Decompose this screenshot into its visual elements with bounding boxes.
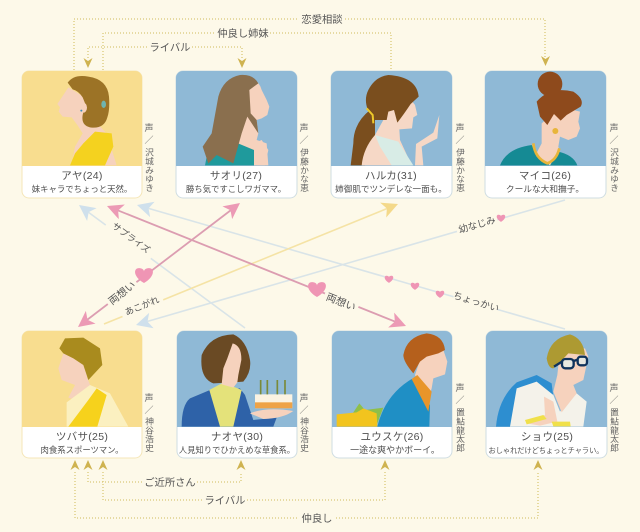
label: 両想い right	[322, 288, 361, 315]
voice: 伊藤かな恵: 声	[299, 122, 309, 133]
voice: 伊藤かな恵: 声	[455, 122, 465, 133]
heart: ちょっかい 2	[411, 283, 419, 290]
top relationship connectors	[74, 13, 550, 70]
label: あこがれ: あこがれ	[123, 294, 161, 317]
voice: 置鮎龍太郎: 置鮎龍太郎	[609, 408, 619, 453]
heart: large centre	[308, 282, 326, 297]
connector: 恋愛相談: 恋愛相談	[301, 13, 343, 26]
voice: 伊藤かな恵	[299, 122, 309, 192]
voice: 伊藤かな恵: ／	[455, 135, 465, 145]
label: サプライズ	[105, 215, 158, 259]
voice: 神谷浩史	[299, 392, 309, 453]
connector: ライバル (top): ライバル	[150, 42, 190, 54]
voice: 置鮎龍太郎	[609, 382, 619, 453]
portrait: アヤ	[57, 76, 117, 165]
label: 両想い left	[103, 276, 140, 310]
name: マイコ: マイコ(26)	[519, 170, 571, 182]
name: アヤ: アヤ(24)	[61, 170, 103, 182]
connector: 恋愛相談	[74, 13, 550, 70]
portrait: ハルカ	[351, 75, 439, 165]
name: ナオヤ: ナオヤ(30)	[211, 431, 263, 443]
voice: 沢城みゆき	[609, 122, 619, 192]
voice: 神谷浩史: 声	[299, 392, 309, 403]
portrait: ナオヤ	[182, 334, 293, 427]
voice: 伊藤かな恵: 伊藤かな恵	[299, 147, 309, 192]
voice: 置鮎龍太郎: ／	[609, 395, 619, 405]
voice: 置鮎龍太郎: 声	[455, 382, 465, 393]
panel: サオリ	[176, 71, 297, 198]
panel: ナオヤ	[177, 331, 297, 458]
voice: 沢城みゆき	[144, 122, 154, 192]
panel: ユウスケ	[332, 331, 452, 458]
label: あこがれ	[119, 291, 165, 320]
connector: ライバル (bottom)	[98, 460, 390, 507]
bottom relationship connectors	[70, 460, 542, 525]
description: マイコ: クールな大和撫子。	[506, 183, 584, 194]
portrait: ユウスケ	[337, 333, 447, 427]
connector: 仲良し: 仲良し	[302, 512, 332, 525]
arrow: サプライズ	[74, 199, 245, 328]
description: ハルカ: 姉御肌でツンデレな一面も。	[335, 183, 447, 194]
diagonal relationship arrows	[73, 197, 565, 333]
heart: ちょっかい 1	[385, 276, 393, 283]
voice: 置鮎龍太郎: 置鮎龍太郎	[455, 408, 465, 453]
voice: 神谷浩史: ／	[299, 405, 309, 415]
voice: 置鮎龍太郎: ／	[455, 395, 465, 405]
description: ショウ: おしゃれだけどちょっとチャラい。	[489, 446, 603, 455]
panel: マイコ	[485, 71, 606, 198]
panel: ショウ	[486, 331, 607, 458]
label: 両想い right: 両想い	[324, 290, 358, 314]
portrait: マイコ	[500, 72, 582, 165]
name: サオリ: サオリ(27)	[210, 170, 262, 182]
connector: 仲良し	[70, 460, 542, 525]
voice: 置鮎龍太郎: 声	[609, 382, 619, 393]
voice: 神谷浩史: 声	[144, 392, 154, 403]
voice: 伊藤かな恵	[455, 122, 465, 192]
label: ちょっかい: ちょっかい	[452, 290, 500, 315]
voice: 神谷浩史: 神谷浩史	[299, 416, 309, 453]
name: ショウ: ショウ(25)	[521, 431, 573, 443]
voice: 沢城みゆき: ／	[609, 135, 619, 145]
arrow: あこがれ	[104, 197, 401, 324]
portrait: ショウ	[496, 334, 588, 427]
voice: 置鮎龍太郎	[455, 382, 465, 453]
connector: ライバル (bottom): ライバル	[205, 495, 245, 507]
description: アヤ: 妹キャラでちょっと天然。	[32, 184, 132, 194]
voice: 神谷浩史	[144, 392, 154, 453]
connector: ご近所さん: ご近所さん	[144, 476, 196, 489]
portrait: サオリ	[203, 75, 269, 165]
voice: 沢城みゆき: 声	[609, 122, 619, 133]
voice: 沢城みゆき: ／	[144, 135, 154, 145]
description: サオリ: 勝ち気ですこしワガママ。	[186, 184, 286, 194]
voice: 神谷浩史: ／	[144, 405, 154, 415]
voice: 伊藤かな恵: ／	[299, 135, 309, 145]
heart: 幼なじみ	[497, 215, 505, 222]
arrow: 両想い (ツバサ–サオリ)	[73, 197, 245, 333]
panel: ツバサ	[22, 331, 142, 458]
panel: アヤ	[22, 71, 142, 198]
label: 幼なじみ: 幼なじみ	[457, 214, 497, 236]
description: ユウスケ: 一途な爽やかボーイ。	[350, 445, 440, 455]
voice: 沢城みゆき: 声	[144, 122, 154, 133]
connector: 仲良し姉妹	[103, 27, 391, 70]
connector: 仲良し姉妹: 仲良し姉妹	[217, 27, 269, 40]
name: ハルカ: ハルカ(31)	[365, 170, 417, 182]
name: ユウスケ: ユウスケ(26)	[360, 431, 424, 443]
voice: 伊藤かな恵: 伊藤かな恵	[455, 147, 465, 192]
connector: ライバル (top)	[84, 42, 246, 68]
label: 両想い left: 両想い	[106, 278, 138, 308]
arrow: 両想い (ユウスケ–アヤ)	[104, 199, 409, 333]
panel: ハルカ	[331, 71, 452, 198]
arrow: ちょっかい	[135, 197, 565, 329]
voice: 神谷浩史: 神谷浩史	[144, 416, 154, 453]
arrow: 幼なじみ	[134, 200, 565, 333]
name: ツバサ: ツバサ(25)	[56, 431, 108, 443]
voice: 沢城みゆき: 沢城みゆき	[609, 147, 619, 192]
portrait: ツバサ	[58, 338, 128, 427]
description: ナオヤ: 人見知りでひかえめな草食系。	[179, 445, 295, 455]
voice: 沢城みゆき: 沢城みゆき	[144, 147, 154, 192]
label: サプライズ: サプライズ	[110, 220, 153, 255]
heart: ちょっかい 3	[436, 291, 444, 298]
connector: ご近所さん	[84, 460, 246, 489]
description: ツバサ: 肉食系スポーツマン。	[40, 445, 124, 455]
heart: large left	[135, 268, 153, 283]
